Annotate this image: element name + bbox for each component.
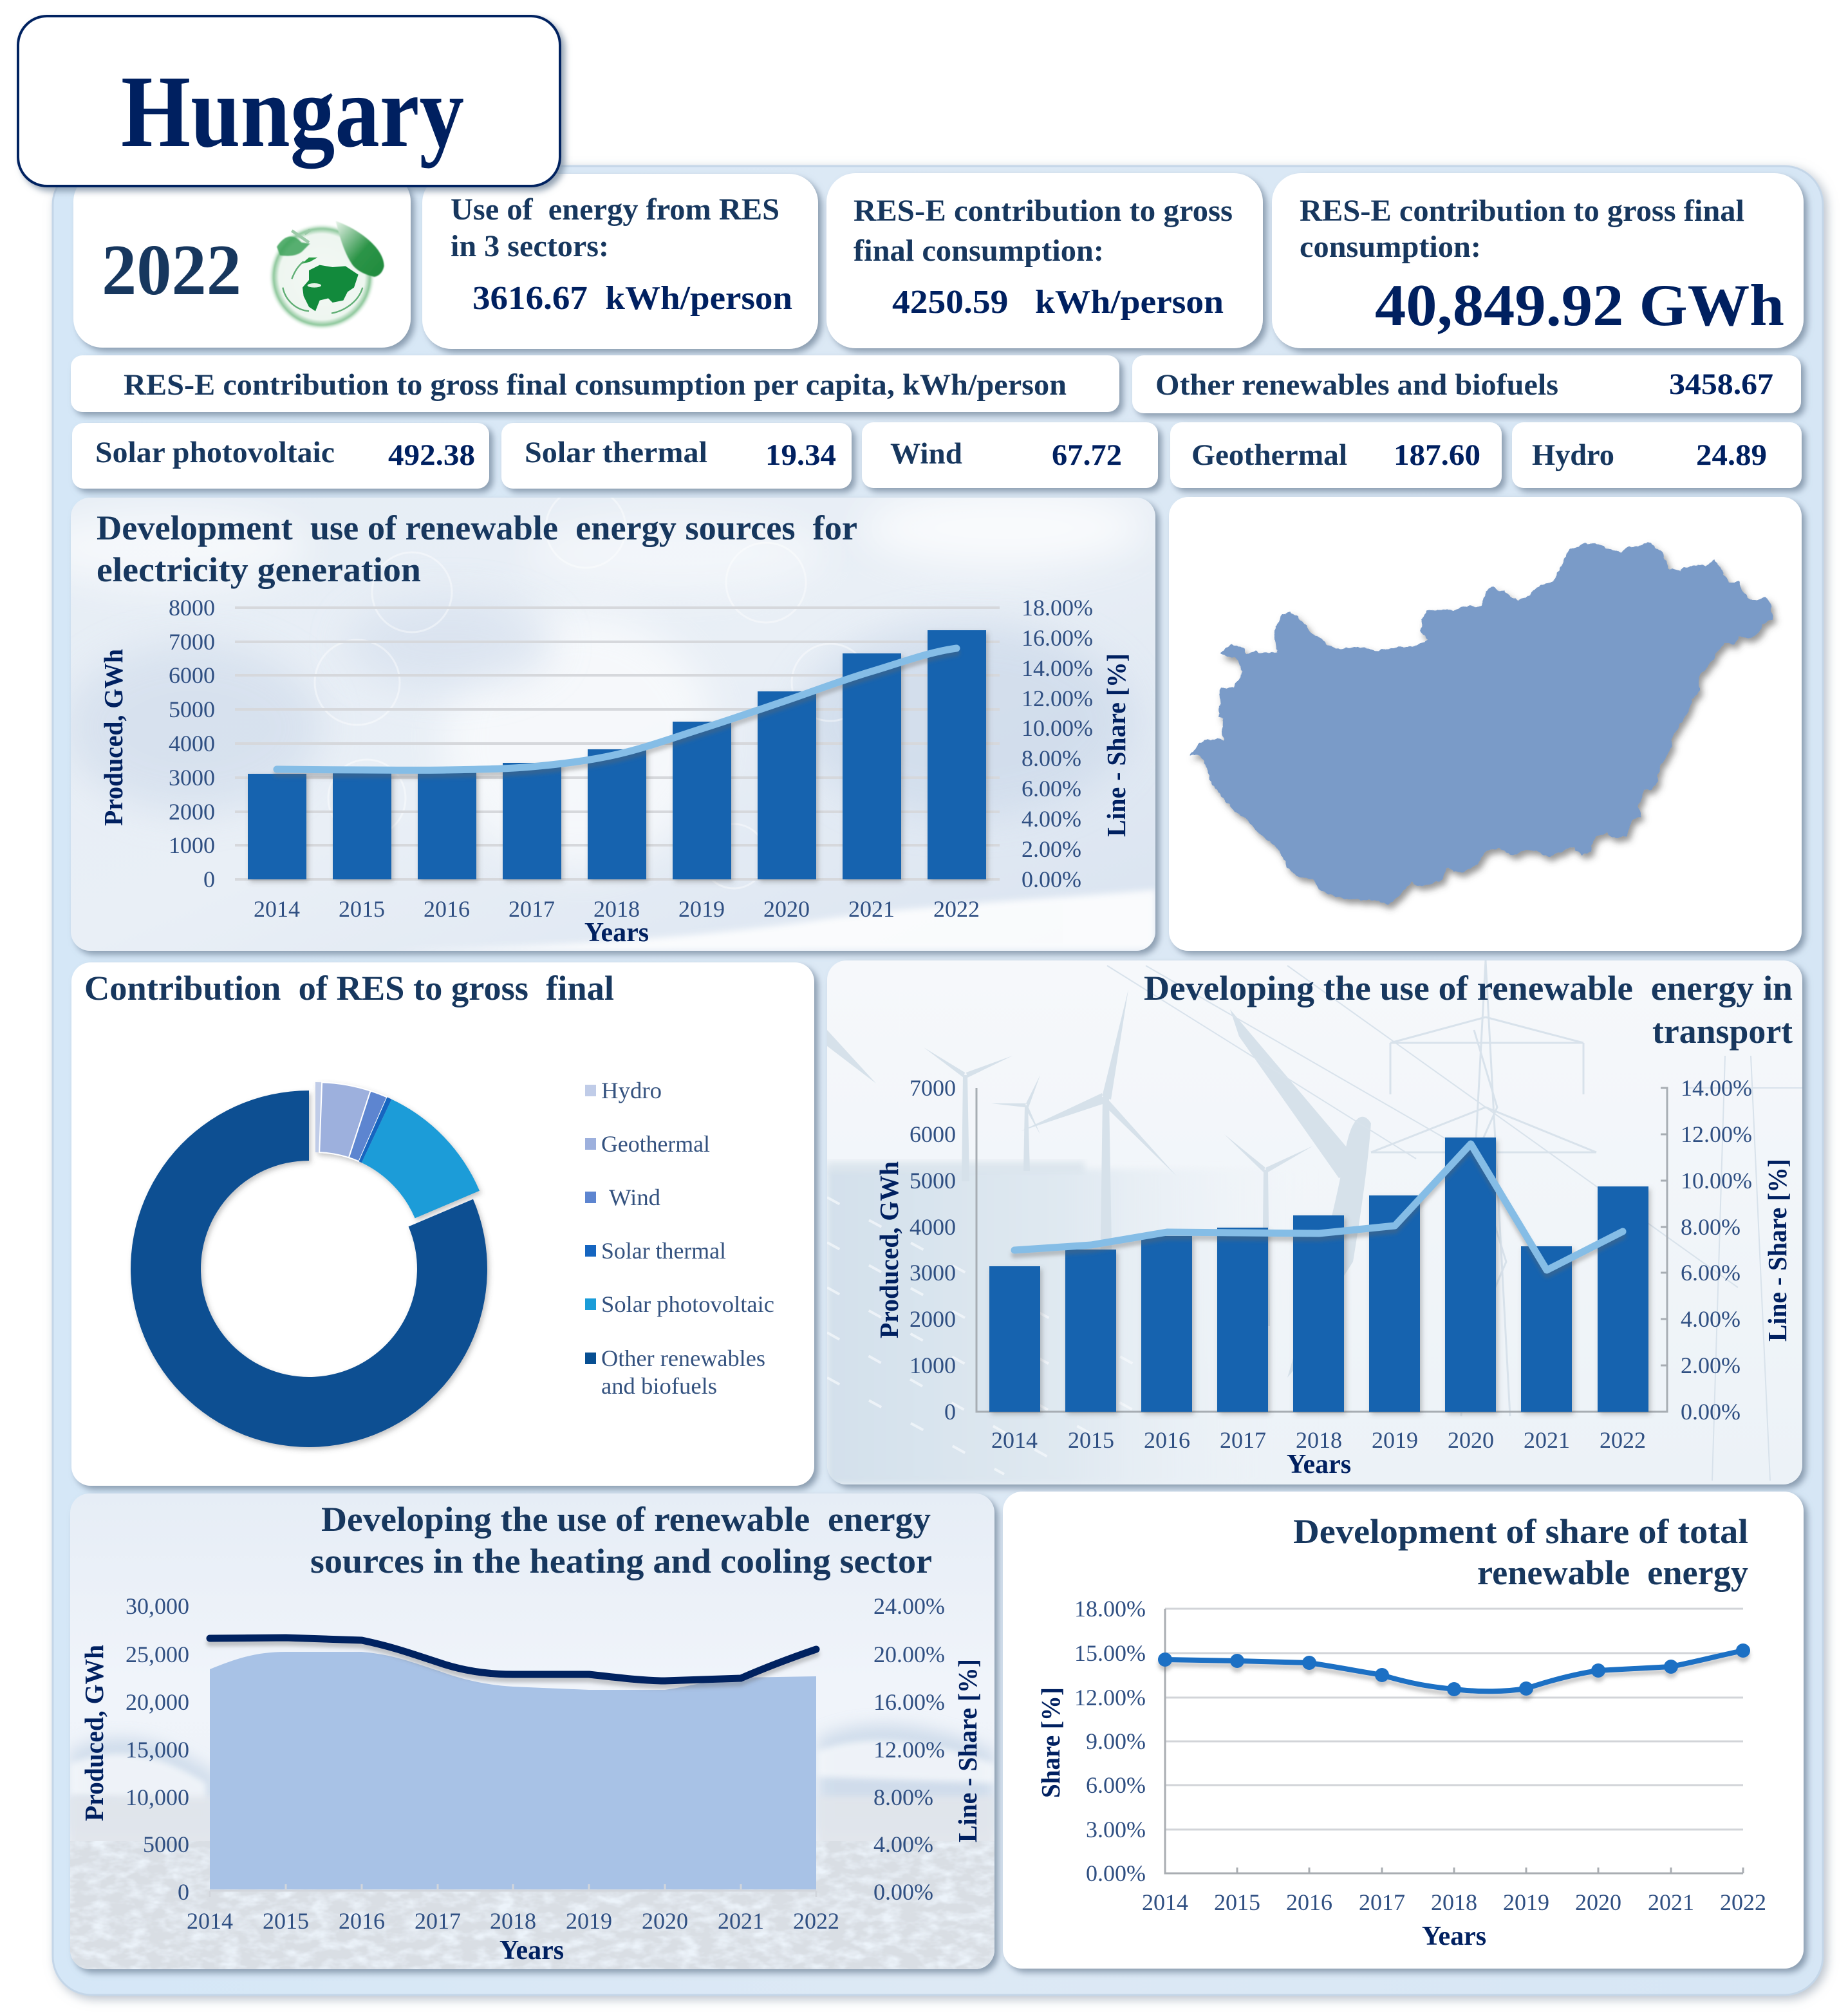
right axis labels: 2.00%: [1681, 1353, 1741, 1378]
x axis labels: 2021: [1524, 1427, 1570, 1453]
x axis labels: 2017: [415, 1908, 461, 1934]
chart title: [310, 1500, 932, 1580]
axis titles: Years: [499, 1936, 564, 1965]
x axis labels: 2018: [490, 1908, 536, 1934]
x axis labels: 2015: [1068, 1427, 1114, 1453]
stat: hydro: Hydro: [1532, 438, 1614, 472]
right axis labels: 6.00%: [1022, 776, 1081, 801]
left axis labels: 2000: [910, 1306, 956, 1332]
chart title: Contribution of RES to gross final: [84, 969, 614, 1007]
right axis labels: 4.00%: [1022, 806, 1081, 832]
left axis labels: [126, 1593, 189, 1905]
card: RES-E per person: [826, 173, 1263, 348]
background: snowy ground texture: [70, 1841, 994, 1970]
x axis labels: 2019: [1372, 1427, 1418, 1453]
stat: wind: [862, 422, 1158, 488]
left axis labels: 3000: [910, 1260, 956, 1286]
year card with globe icon: [73, 173, 411, 348]
x axis labels: 2016: [1286, 1889, 1332, 1915]
x axis labels: 2018: [1431, 1889, 1477, 1915]
x axis labels: 2018: [593, 896, 640, 922]
left axis labels: 30,000: [126, 1593, 189, 1619]
card: RES-E total GWh: [1272, 173, 1804, 348]
grid and axes: [1165, 1609, 1743, 1873]
card: use of energy from RES: [422, 174, 818, 349]
stat: geothermal: [1170, 422, 1502, 488]
left axis labels: 1000: [910, 1353, 956, 1378]
x axis labels: 2018: [1296, 1427, 1342, 1453]
x axis labels: 2017: [509, 896, 555, 922]
other renewables value bar: 3458.67: [1669, 368, 1773, 401]
right axis labels: 12.00%: [873, 1737, 945, 1763]
grid lines: [235, 608, 1000, 879]
right axis labels: 12.00%: [1681, 1121, 1752, 1147]
card: RES-E per person: 4250.59 kWh/person: [892, 284, 1224, 321]
other renewables value bar: Other renewables and biofuels: [1155, 368, 1558, 402]
bars: [248, 630, 986, 879]
x axis labels: 2022: [793, 1908, 839, 1934]
right axis labels: 10.00%: [1022, 715, 1093, 741]
axis titles: Years: [1287, 1450, 1351, 1479]
x axis labels: 2015: [339, 896, 385, 922]
right axis labels: 12.00%: [1022, 686, 1093, 711]
x axis labels: 2019: [566, 1908, 612, 1934]
right axis labels: 16.00%: [873, 1689, 945, 1715]
right axis labels: 18.00%: [1022, 595, 1093, 621]
chart title: sources in the heating and cooling sector: [310, 1542, 932, 1580]
y axis labels: 15.00%: [1074, 1640, 1146, 1666]
card: RES-E per person: RES-E contribution to gross: [854, 194, 1233, 228]
right axis labels: 8.00%: [873, 1784, 933, 1810]
left axis labels: 5000: [143, 1831, 189, 1857]
title box: Hungary: [18, 16, 560, 186]
axis titles: [98, 649, 1131, 948]
share line with markers: [1158, 1643, 1750, 1696]
background: wind turbines: [827, 989, 1371, 1378]
x axis labels: 2020: [642, 1908, 688, 1934]
x axis labels: 2022: [1600, 1427, 1646, 1453]
x axis labels: 2017: [1359, 1889, 1405, 1915]
card: RES-E total GWh: 40,849.92 GWh: [1375, 272, 1784, 338]
right axis labels: 16.00%: [1022, 625, 1093, 651]
left axis labels: 5000: [910, 1168, 956, 1194]
left axis labels: 10,000: [126, 1784, 189, 1810]
legend: Wind: [609, 1184, 660, 1210]
y axis labels: 0.00%: [1086, 1860, 1146, 1886]
left axis labels: 3000: [169, 765, 215, 791]
panel: electricity generation: [26, 488, 1155, 951]
x axis labels: 2014: [254, 896, 300, 922]
stat: wind: 67.72: [1052, 438, 1122, 472]
card: RES-E per person: final consumption:: [854, 234, 1104, 268]
x axis labels: 2020: [763, 896, 810, 922]
left axis labels: 25,000: [126, 1642, 189, 1667]
card: RES-E total GWh: RES-E contribution to gross final: [1300, 194, 1744, 228]
axis titles: [874, 1159, 1792, 1479]
background: snowy hills: [70, 1724, 994, 1835]
stat: solar thermal: Solar thermal: [525, 436, 707, 469]
left axis labels: 15,000: [126, 1737, 189, 1763]
legend: Geothermal: [601, 1131, 710, 1157]
axis titles: Line - Share [%]: [953, 1659, 982, 1842]
stat: hydro: [1512, 422, 1802, 488]
x axis labels: 2022: [1720, 1889, 1766, 1915]
y axis labels: [1074, 1596, 1146, 1886]
left axis labels: 1000: [169, 832, 215, 858]
left axis labels: 5000: [169, 697, 215, 722]
stat: solar thermal: 19.34: [765, 438, 836, 472]
chart title: [1293, 1512, 1748, 1592]
legend: Other renewables: [601, 1345, 765, 1371]
right axis labels: [873, 1593, 945, 1905]
y axis labels: 18.00%: [1074, 1596, 1146, 1622]
axis titles: Produced, GWh: [79, 1645, 109, 1821]
title box: Hungary: Hungary: [121, 54, 464, 169]
axis titles: Years: [1422, 1922, 1486, 1951]
x axis labels: 2019: [1503, 1889, 1549, 1915]
chart title: electricity generation: [97, 550, 421, 589]
stat: solar photovoltaic: [72, 423, 489, 489]
x axis labels: 2021: [1648, 1889, 1694, 1915]
card: use of energy from RES: Use of energy from RES: [451, 192, 779, 227]
axis titles: Line - Share [%]: [1762, 1159, 1792, 1342]
right axis labels: [1022, 595, 1093, 892]
chart title: Development use of renewable energy sources for: [97, 509, 857, 547]
per capita heading bar: [71, 355, 1119, 412]
axis titles: Share [%]: [1036, 1687, 1065, 1798]
legend: Solar thermal: [601, 1238, 726, 1264]
panel: share of total renewable energy: [1003, 1492, 1804, 1969]
x axis labels: [991, 1427, 1646, 1453]
y axis labels: 6.00%: [1086, 1772, 1146, 1798]
background: solar field: [827, 1169, 1161, 1484]
y axis labels: 9.00%: [1086, 1728, 1146, 1754]
legend: [585, 1078, 774, 1399]
stat: geothermal: Geothermal: [1191, 438, 1347, 472]
card: RES-E total GWh: consumption:: [1300, 230, 1481, 264]
right axis labels: 24.00%: [873, 1593, 945, 1619]
chart title: transport: [1652, 1012, 1793, 1051]
share line: [277, 648, 957, 770]
axis titles: [79, 1645, 982, 1965]
chart title: [1144, 969, 1793, 1051]
x axis labels: 2014: [187, 1908, 233, 1934]
icon: green globe with leaf and plug: [268, 221, 384, 330]
left axis labels: 7000: [169, 629, 215, 655]
x axis labels: 2022: [933, 896, 980, 922]
panel: map of Hungary: [1169, 497, 1802, 951]
x axis labels: 2015: [263, 1908, 309, 1934]
x axis labels: 2021: [718, 1908, 764, 1934]
share line: [1014, 1144, 1623, 1270]
x axis labels: 2016: [424, 896, 470, 922]
right axis labels: 0.00%: [873, 1879, 933, 1905]
left axis labels: 2000: [169, 799, 215, 825]
right axis labels: 14.00%: [1681, 1075, 1752, 1101]
right axis labels: 4.00%: [873, 1831, 933, 1857]
stat: hydro: 24.89: [1696, 438, 1767, 472]
stat: solar thermal: [501, 423, 852, 489]
stat: wind: Wind: [890, 437, 962, 471]
y axis labels: 3.00%: [1086, 1817, 1146, 1842]
axis titles: Produced, GWh: [874, 1161, 904, 1338]
x axis labels: 2017: [1220, 1427, 1266, 1453]
right axis labels: 10.00%: [1681, 1168, 1752, 1194]
right axis labels: 20.00%: [873, 1642, 945, 1667]
x axis labels: 2014: [1142, 1889, 1188, 1915]
map silhouette: [1190, 541, 1773, 905]
chart title: Developing the use of renewable energy in: [1144, 969, 1793, 1007]
x axis labels: 2014: [991, 1427, 1038, 1453]
share line: [210, 1638, 816, 1681]
panel: transport: [827, 960, 1802, 1484]
stat: solar photovoltaic: 492.38: [388, 438, 475, 472]
legend: Solar photovoltaic: [601, 1291, 774, 1317]
axis titles: [1036, 1687, 1486, 1951]
per capita heading bar: RES-E contribution to gross final consumption per capita, kWh/person: [124, 368, 1067, 402]
stat: geothermal: 187.60: [1394, 438, 1480, 472]
x axis labels: [187, 1908, 839, 1934]
stat: solar photovoltaic: Solar photovoltaic: [95, 436, 335, 469]
legend: and biofuels: [601, 1373, 717, 1399]
chart title: Developing the use of renewable energy: [321, 1500, 931, 1539]
right axis labels: 0.00%: [1681, 1399, 1741, 1425]
left axis labels: 8000: [169, 595, 215, 621]
x axis with ticks: [210, 1884, 816, 1897]
legend: Hydro: [601, 1078, 662, 1103]
chart title: [97, 509, 857, 589]
left axis labels: [910, 1075, 956, 1425]
x axis labels: 2019: [678, 896, 725, 922]
card: use of energy from RES: 3616.67 kWh/person: [472, 280, 792, 317]
right axis labels: 8.00%: [1681, 1214, 1741, 1240]
other renewables value bar: [1132, 355, 1801, 413]
right axis labels: 0.00%: [1022, 866, 1081, 892]
chart title: renewable energy: [1477, 1553, 1748, 1592]
right axis labels: 14.00%: [1022, 655, 1093, 681]
panel: heating and cooling: [70, 1493, 994, 1970]
left axis labels: 0: [178, 1879, 189, 1905]
y axis labels: 12.00%: [1074, 1685, 1146, 1710]
background: pylons and wires: [1107, 960, 1802, 1481]
left axis labels: 0: [944, 1399, 956, 1425]
left axis labels: [169, 595, 215, 892]
left axis labels: 4000: [910, 1214, 956, 1240]
left axis labels: 4000: [169, 731, 215, 756]
year card with globe icon: 2022: [102, 230, 241, 310]
x axis labels: 2016: [1144, 1427, 1190, 1453]
card: use of energy from RES: in 3 sectors:: [451, 229, 609, 263]
chart title: Development of share of total: [1293, 1512, 1748, 1551]
left axis labels: 6000: [910, 1121, 956, 1147]
left axis labels: 0: [203, 866, 215, 892]
right axis labels: 4.00%: [1681, 1306, 1741, 1332]
x axis labels: 2021: [848, 896, 895, 922]
area series: [210, 1652, 816, 1889]
right axis labels: 6.00%: [1681, 1260, 1741, 1286]
x axis labels: [254, 896, 980, 922]
left axis labels: 6000: [169, 662, 215, 688]
donut chart: [131, 1082, 487, 1447]
axis titles: Line - Share [%]: [1101, 653, 1131, 837]
panel: contribution of RES donut: [71, 962, 814, 1486]
axes: [976, 1088, 1667, 1412]
x axis labels: [1142, 1889, 1766, 1915]
x axis labels: 2016: [339, 1908, 385, 1934]
axis titles: Years: [584, 918, 649, 948]
right axis labels: 8.00%: [1022, 745, 1081, 771]
left axis labels: 7000: [910, 1075, 956, 1101]
left axis labels: 20,000: [126, 1689, 189, 1715]
x axis labels: 2020: [1575, 1889, 1621, 1915]
x axis labels: 2015: [1214, 1889, 1260, 1915]
right axis labels: 2.00%: [1022, 836, 1081, 862]
x axis labels: 2020: [1448, 1427, 1494, 1453]
right axis labels: [1681, 1075, 1752, 1425]
axis titles: Produced, GWh: [98, 649, 128, 826]
bars: [989, 1138, 1648, 1412]
